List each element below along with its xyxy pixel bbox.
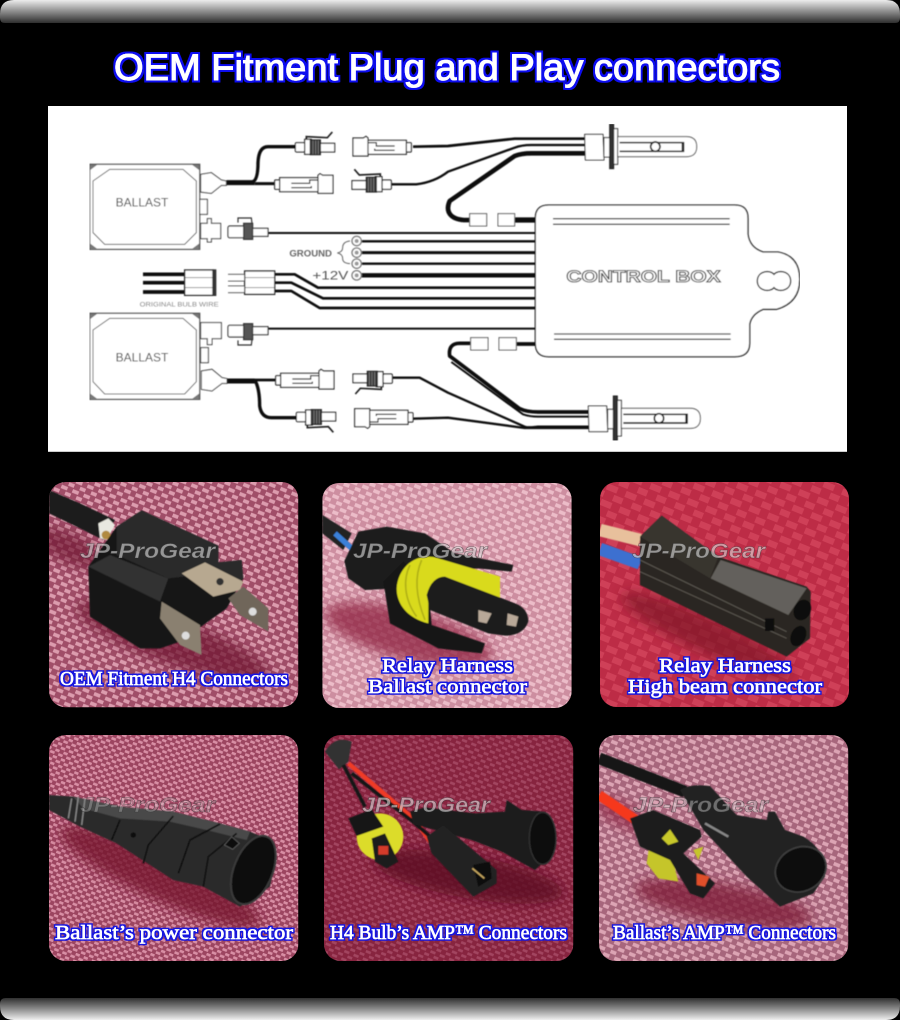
original bulb wire plug: ORIGINAL BULB WIRE <box>140 302 219 308</box>
top glossy bar <box>0 0 900 23</box>
caption: High beam connector <box>628 676 822 698</box>
photo: high beam connector <box>600 482 849 707</box>
caption: Ballast’s power connector <box>55 922 293 944</box>
ballast 1: BALLAST <box>116 195 169 209</box>
ground and +12V terminals: GROUND <box>289 249 333 259</box>
wires: harness to ballasts and control box <box>143 139 589 428</box>
watermark: JP-ProGear <box>362 794 492 817</box>
photo: H4 connector <box>30 482 298 707</box>
watermark: JP-ProGear <box>80 540 217 563</box>
bulb top <box>585 124 697 169</box>
bottom glossy bar <box>0 998 900 1020</box>
panel: Ballast's power connector <box>49 735 298 961</box>
bulb bottom <box>588 396 700 440</box>
watermark: JP-ProGear <box>632 540 767 563</box>
panel: Relay Harness Ballast connector <box>318 483 572 708</box>
control box <box>470 205 800 357</box>
caption: Ballast’s AMP™ Connectors <box>613 922 836 944</box>
panel: wiring diagram <box>48 106 847 452</box>
ground and +12V terminals <box>289 236 361 282</box>
caption: H4 Bulb’s AMP™ Connectors <box>330 922 567 944</box>
ballast 2 <box>90 313 227 399</box>
photo: ballast connector with yellow seal <box>318 483 572 708</box>
photo: H4 bulb AMP connectors <box>324 735 573 961</box>
control box: CONTROL BOX <box>566 267 721 286</box>
panel: OEM Fitment H4 Connectors <box>30 482 298 707</box>
connectors: plug pairs <box>228 132 413 432</box>
panel: Ballast's AMP Connectors <box>588 735 848 961</box>
original bulb wire plug <box>140 269 275 308</box>
ballast 2: BALLAST <box>116 351 169 365</box>
ballast 1 <box>90 164 226 249</box>
ground and +12V terminals: +12V <box>312 268 349 282</box>
photo: ballast AMP connectors <box>588 735 848 961</box>
caption: OEM Fitment H4 Connectors <box>60 668 288 690</box>
caption: Relay Harness <box>659 655 791 677</box>
photo: power connector <box>49 735 298 961</box>
caption <box>628 655 822 698</box>
caption: Ballast connector <box>368 676 527 698</box>
caption: Relay Harness <box>382 655 513 677</box>
panel: Relay Harness High beam connector <box>600 482 849 707</box>
panel: H4 Bulb's AMP Connectors <box>324 735 573 961</box>
watermark: JP-ProGear <box>80 794 217 817</box>
watermark: JP-ProGear <box>353 540 489 563</box>
watermark: JP-ProGear <box>633 794 770 817</box>
caption <box>368 655 527 698</box>
title: OEM Fitment Plug and Play connectors <box>114 47 780 88</box>
